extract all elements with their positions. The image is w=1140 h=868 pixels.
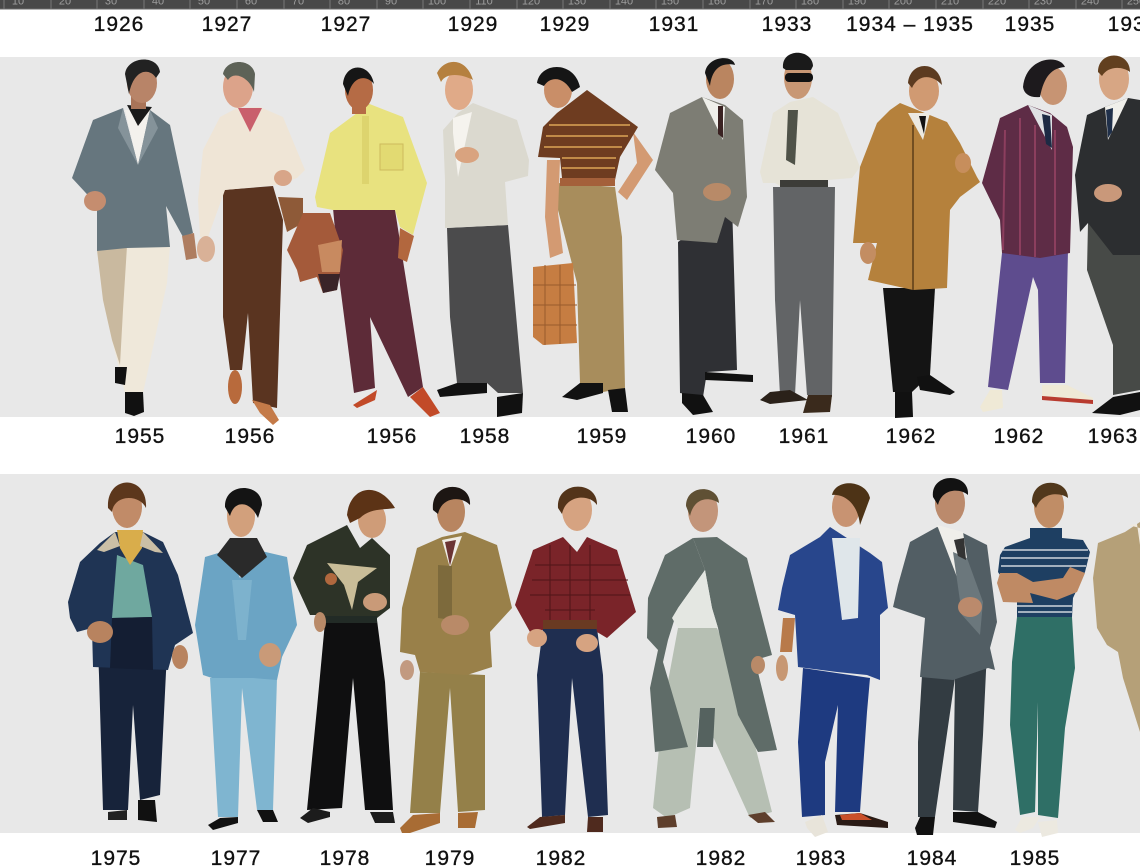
top row bottom year labels: 1962 [886, 425, 936, 448]
figure: 1979 camel three-piece suit [400, 487, 512, 833]
top row bottom year labels: 1958 [460, 425, 510, 448]
top row bottom year labels: 1960 [686, 425, 736, 448]
top row bottom year labels: 1962 [994, 425, 1044, 448]
figure: 1983 blue denim outfit [776, 483, 888, 837]
figure: tan suit cut off at right edge [1093, 522, 1140, 732]
figure: 1958 cardigan and grey trousers [437, 62, 529, 417]
figure: 1962 duffle coat [853, 66, 980, 418]
panel: 1970s-80s band [0, 474, 1140, 833]
top row year labels: 1934 – 1935 [846, 13, 974, 36]
top row year labels: 1927 [202, 13, 252, 36]
top row year labels [94, 13, 1140, 36]
figure: 1963 dark suit [1075, 56, 1140, 415]
top row bottom year labels: 1955 [115, 425, 165, 448]
top row bottom year labels: 1956 [225, 425, 275, 448]
top row bottom year labels [115, 425, 1138, 448]
figure: 1959 patterned shirt, khaki trousers and basket [533, 67, 653, 412]
bottom row year labels [91, 847, 1060, 868]
ruler bar [0, 0, 1140, 10]
top row bottom year labels: 1959 [577, 425, 627, 448]
figure: 1961 white shirt, sunglasses and grey trousers [760, 53, 860, 413]
figure: 1956 yellow shirt, burgundy trousers and plaid jacket [287, 68, 440, 417]
panel: 1950s-60s band [0, 57, 1140, 417]
figure: 1956 cream shirt and brown trousers [197, 62, 305, 425]
figure: 1978 patterned shirt and black flares [293, 490, 395, 823]
figure: 1982 long grey coat and pale trousers [647, 489, 777, 828]
top row year labels: 1935 [1005, 13, 1055, 36]
figure: 1955 grey blazer and cream trousers [72, 59, 197, 416]
figure: 1975 denim jacket and turtleneck [68, 482, 193, 822]
figure: 1982 red shirt and navy jeans [515, 487, 636, 832]
top row year labels: 1931 [649, 13, 699, 36]
top row year labels: 1929 [448, 13, 498, 36]
figure: 1960 check jacket and dark trousers [655, 58, 753, 415]
top row year labels: 1933 [762, 13, 812, 36]
figure: 1984 grey suit [893, 478, 997, 835]
figure: 1985 striped polo and teal trousers [997, 483, 1090, 837]
top row year labels: 1927 [321, 13, 371, 36]
top row bottom year labels: 1961 [779, 425, 829, 448]
top row year labels: 1926 [94, 13, 144, 36]
figure: 1962 striped blazer and purple trousers [980, 59, 1093, 412]
top row bottom year labels: 1956 [367, 425, 417, 448]
top row bottom year labels: 1963 [1088, 425, 1138, 448]
figure: 1977 light blue suit [195, 488, 297, 830]
top row year labels: 1929 [540, 13, 590, 36]
